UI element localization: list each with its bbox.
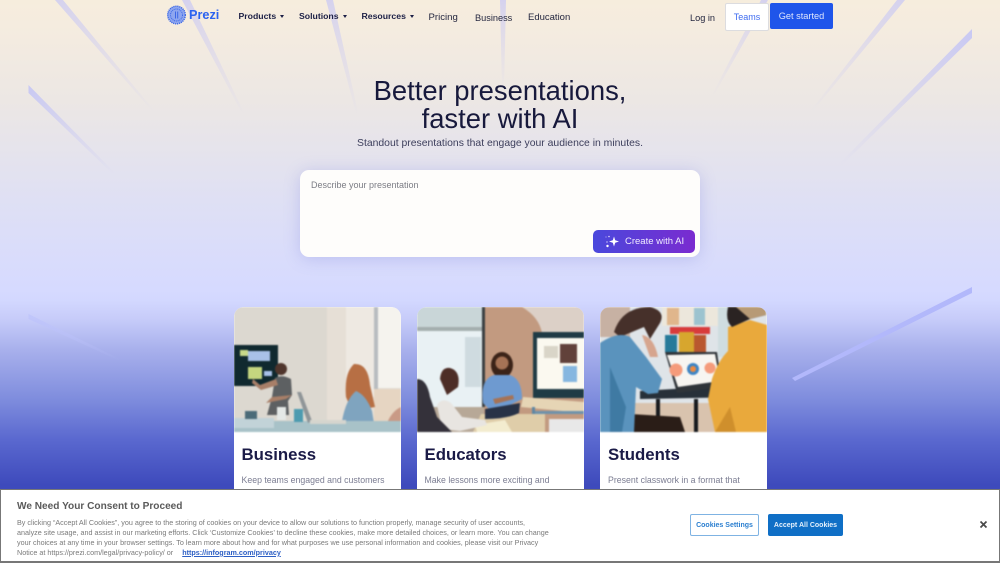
description: Make lessons more exciting and: [424, 475, 550, 485]
heading: Students: Students: [608, 445, 680, 464]
button: Teams: Teams: [734, 12, 760, 22]
icon: sparkle: [606, 236, 619, 248]
banner body text: By clicking “Accept All Cookies”, you agree to the storing of cookies on your device to allow our solutions to function properly, manage security of user accounts,: [17, 518, 525, 526]
nav: Education: Education: [528, 12, 570, 22]
placeholder text: Describe your presentation: [311, 180, 419, 190]
banner body text: Notice at https://prezi.com/legal/privacy-policy/ or https://infogram.com/privacy: [17, 548, 281, 557]
nav: Pricing: Pricing: [428, 12, 458, 22]
button: Accept All Cookies: Accept All Cookies: [774, 522, 837, 529]
card: Educators: [416, 307, 584, 489]
nav: Solutions: Solutions: [299, 10, 339, 20]
button: Cookies Settings: [690, 514, 759, 536]
title: Better presentations,: [374, 75, 626, 106]
card: Business: [234, 307, 400, 489]
logo: Prezi: Prezi: [189, 8, 219, 22]
banner body text: your choices at any time in your browser settings. To learn more about how and for what purposes we use personal information and cookies, please visit our Privacy: [17, 538, 538, 547]
title: [374, 75, 626, 134]
prompt box: [300, 170, 700, 257]
title: faster with AI: [422, 103, 578, 134]
photo: business meeting: [234, 307, 401, 433]
button: Get started: Get started: [779, 10, 824, 20]
button: Get started: [770, 2, 833, 28]
description: Present classwork in a format that: [608, 475, 740, 485]
button: Cookies Settings: Cookies Settings: [696, 522, 753, 529]
icon: Prezi globe: [167, 6, 186, 24]
banner body text: analyze site usage, and assist in our marketing efforts. Click ‘Customize Cookies’ to decline these cookies, make more detailed choices, or learn more. You can change: [17, 528, 549, 537]
photo: educator in classroom: [417, 307, 584, 433]
banner body text: [17, 518, 549, 557]
description: Keep teams engaged and customers: [242, 475, 385, 485]
photo: students with laptop: [600, 307, 767, 433]
nav: Products: Products: [238, 10, 276, 20]
nav: Log in: Log in: [690, 12, 715, 22]
cookie consent banner: [0, 489, 1000, 563]
heading: Educators: Educators: [424, 445, 507, 464]
card: Students: [600, 307, 767, 489]
button: Teams: [725, 2, 769, 30]
button: Accept All Cookies: [768, 514, 843, 536]
subtitle: Standout presentations that engage your audience in minutes.: [357, 138, 643, 148]
nav: Resources: Resources: [362, 10, 406, 20]
nav: Business: Business: [475, 12, 512, 22]
button: Create with AI: Create with AI: [625, 236, 684, 246]
heading: Business: Business: [242, 445, 316, 464]
icon: close: [980, 520, 987, 528]
button: Create with AI: [593, 230, 695, 252]
banner heading: We Need Your Consent to Proceed: [17, 500, 182, 512]
logo: Prezi: [167, 6, 219, 24]
